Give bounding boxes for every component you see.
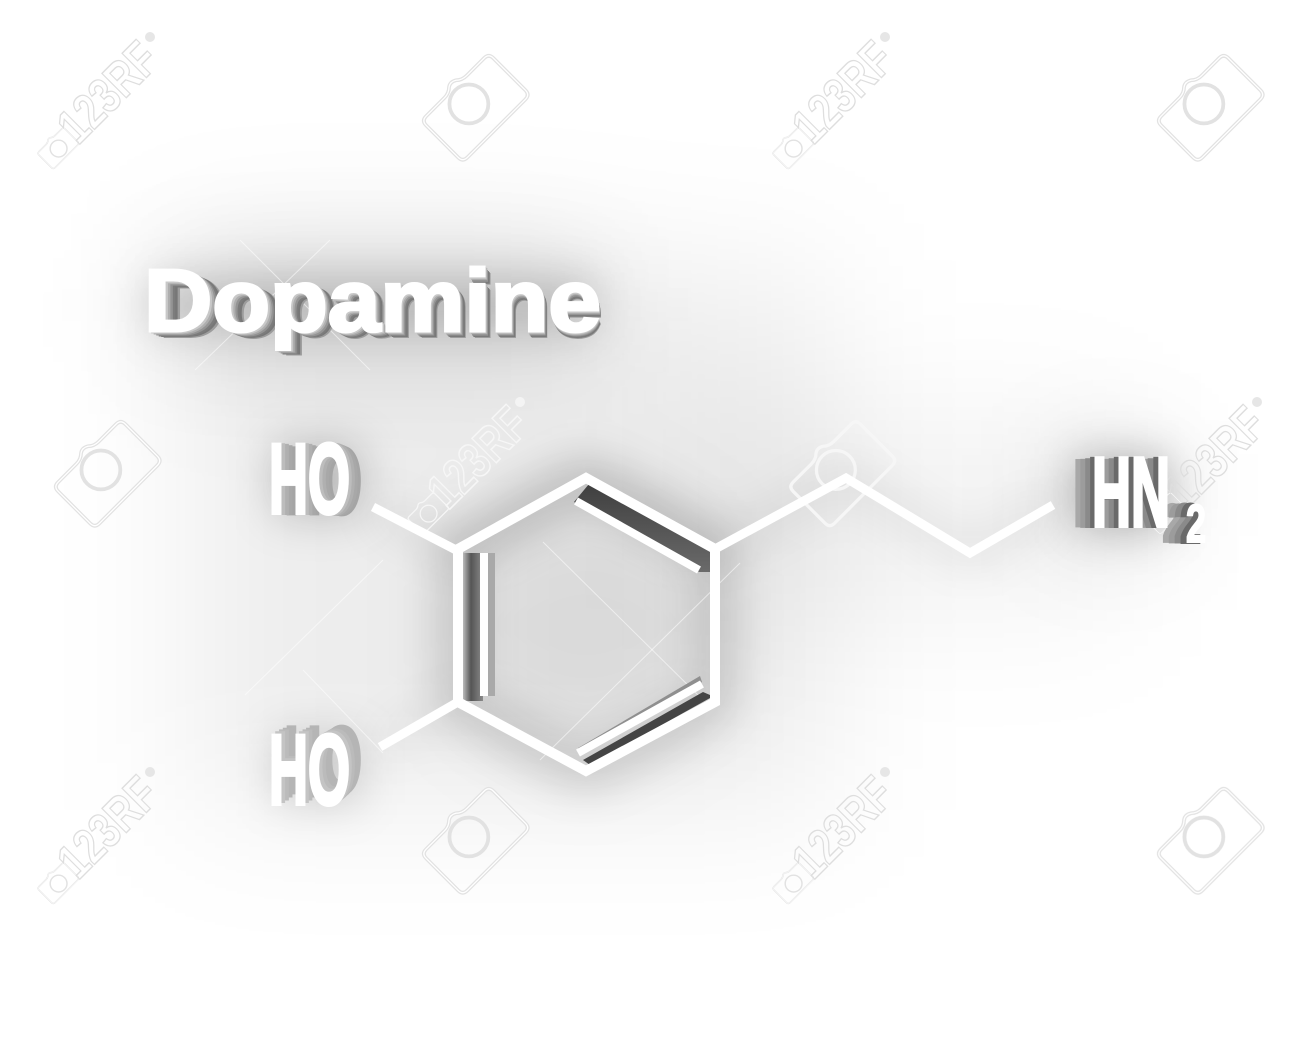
inner bond bottom right: [578, 684, 702, 753]
inner bond left: [480, 553, 488, 696]
HN2 extrusion: HN: [1088, 438, 1165, 547]
title extrusion: Dopamine: [147, 253, 601, 351]
HN2 extrusion: 2: [1163, 494, 1182, 552]
title face: Dopamine: [144, 251, 601, 350]
watermark logo row 2 right: [1143, 396, 1276, 534]
watermark logo row 1 left: 123RF: [46, 31, 169, 154]
dopamine structural formula: [373, 478, 1053, 771]
HN2 extrusion: HN: [1073, 441, 1148, 546]
lower HO extrusion: HO: [277, 710, 356, 819]
benzene ring: [458, 478, 715, 771]
HN2 extrusion: HN: [1083, 440, 1159, 547]
HN2 face: HN: [1092, 437, 1170, 547]
ambient shadow: [150, 250, 1170, 810]
upper HO extrusion: HO: [273, 424, 353, 534]
inner bond top right: [576, 501, 699, 570]
title extrusion: Dopamine: [159, 261, 602, 356]
icon: camera 1: [417, 49, 530, 162]
HN2 label: [1073, 437, 1206, 554]
watermark logo row 2 left: 123RF: [416, 396, 539, 519]
watermark logo row 3 left: 123RF: [46, 766, 169, 889]
lower HO extrusion: HO: [273, 712, 353, 822]
watermark logo row 3 right: [771, 766, 904, 904]
lower HO label: [269, 708, 362, 825]
icon: camera 6: [1152, 782, 1265, 895]
lower HO extrusion: HO: [284, 708, 362, 814]
title: Dopamine: [144, 251, 602, 356]
upper HO extrusion: HO: [284, 428, 362, 534]
watermark: camera icons: [49, 49, 1265, 895]
upper HO face: HO: [269, 423, 350, 534]
watermark logo row 1 right: [771, 31, 904, 169]
icon: camera 5: [417, 782, 530, 895]
upper HO extrusion: [273, 424, 362, 534]
watermark logo row 1 left: [36, 31, 169, 169]
icon: camera 3: [49, 415, 162, 528]
HN2 extrusion: HN: [1078, 441, 1153, 547]
upper HO extrusion: HO: [277, 425, 356, 534]
title extrusion: Dopamine: [154, 258, 602, 354]
HN2 face: 2: [1186, 494, 1206, 554]
title extrusion: Dopamine: [152, 257, 602, 353]
icon: camera 2: [1152, 49, 1265, 162]
lower HO face: HO: [269, 714, 350, 825]
lower HO extrusion: [273, 708, 362, 822]
title extrusion: Dopamine: [149, 255, 601, 352]
bond to upper HO: [373, 507, 458, 551]
title extrusion: Dopamine: [157, 259, 602, 355]
HN2 extrusion: 2: [1175, 495, 1194, 554]
watermark logo row 3 left: [36, 766, 169, 904]
upper HO label: [269, 423, 362, 534]
watermark logo row 2 right: 123RF: [1153, 396, 1276, 519]
watermark logo row 3 right: 123RF: [781, 766, 904, 889]
watermark diagonal lines: [195, 240, 740, 760]
icon: camera 4: [784, 415, 897, 528]
watermark logo row 2 left: [406, 396, 539, 534]
ethylamine side chain: [715, 478, 1053, 553]
lower HO extrusion: HO: [280, 709, 359, 816]
upper HO extrusion: HO: [280, 427, 359, 534]
HN2 extrusion: 2: [1169, 495, 1188, 553]
bond to lower HO: [380, 702, 458, 747]
inner shading of double bonds: [463, 484, 710, 765]
HN2 extrusion: 2: [1181, 495, 1200, 554]
watermark logo row 1 right: 123RF: [781, 31, 904, 154]
